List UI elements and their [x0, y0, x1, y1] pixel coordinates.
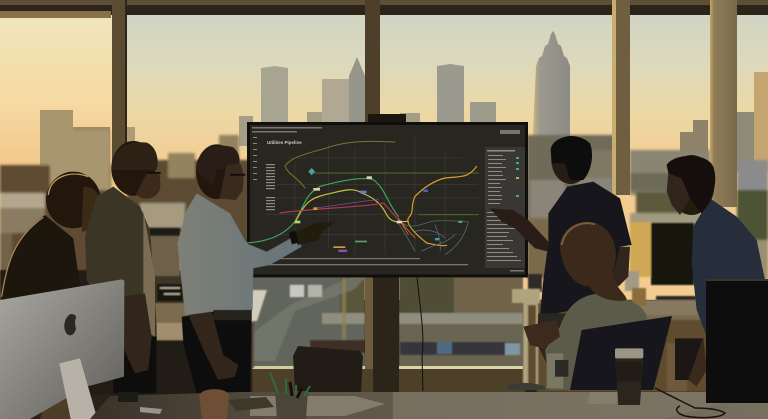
person 1: seated man, dark shirt [0, 172, 101, 330]
wall-mounted map display [245, 122, 528, 278]
person 6: man in blue shirt looking at the screen [667, 155, 765, 387]
office chair [570, 316, 672, 390]
notebook and papers on the desk [118, 392, 274, 414]
pen holder with pens [270, 372, 310, 419]
map title: Utilities Pipeline [267, 140, 302, 145]
display surface [250, 125, 525, 274]
window wall sill [150, 277, 525, 393]
person 5: seated woman from behind in an office chair [507, 222, 672, 390]
network map [245, 135, 482, 258]
person 4: presenter in navy polo [490, 136, 632, 363]
cable and mouse at the right of the desk [417, 277, 725, 418]
person 3: presenter pointing at the map [177, 144, 335, 393]
storage box on the sill [293, 346, 363, 392]
foreground monitor [706, 279, 768, 403]
right side data panel [485, 147, 525, 268]
apple logo [64, 314, 76, 335]
foreground desk [90, 392, 768, 419]
background desks on the right [512, 222, 707, 392]
parking lot below the screen [250, 277, 523, 368]
iMac in the foreground [0, 279, 124, 419]
toolbar and bottom legend [252, 127, 524, 272]
left data column [253, 137, 275, 210]
city skyline seen through the windows [0, 0, 768, 300]
person 2: standing man, grey polo [85, 141, 161, 393]
coffee cup on the right [615, 348, 643, 405]
coffee cup on the left [199, 389, 229, 419]
iMac stand [59, 358, 97, 419]
background desk and monitor on the left [0, 228, 267, 395]
